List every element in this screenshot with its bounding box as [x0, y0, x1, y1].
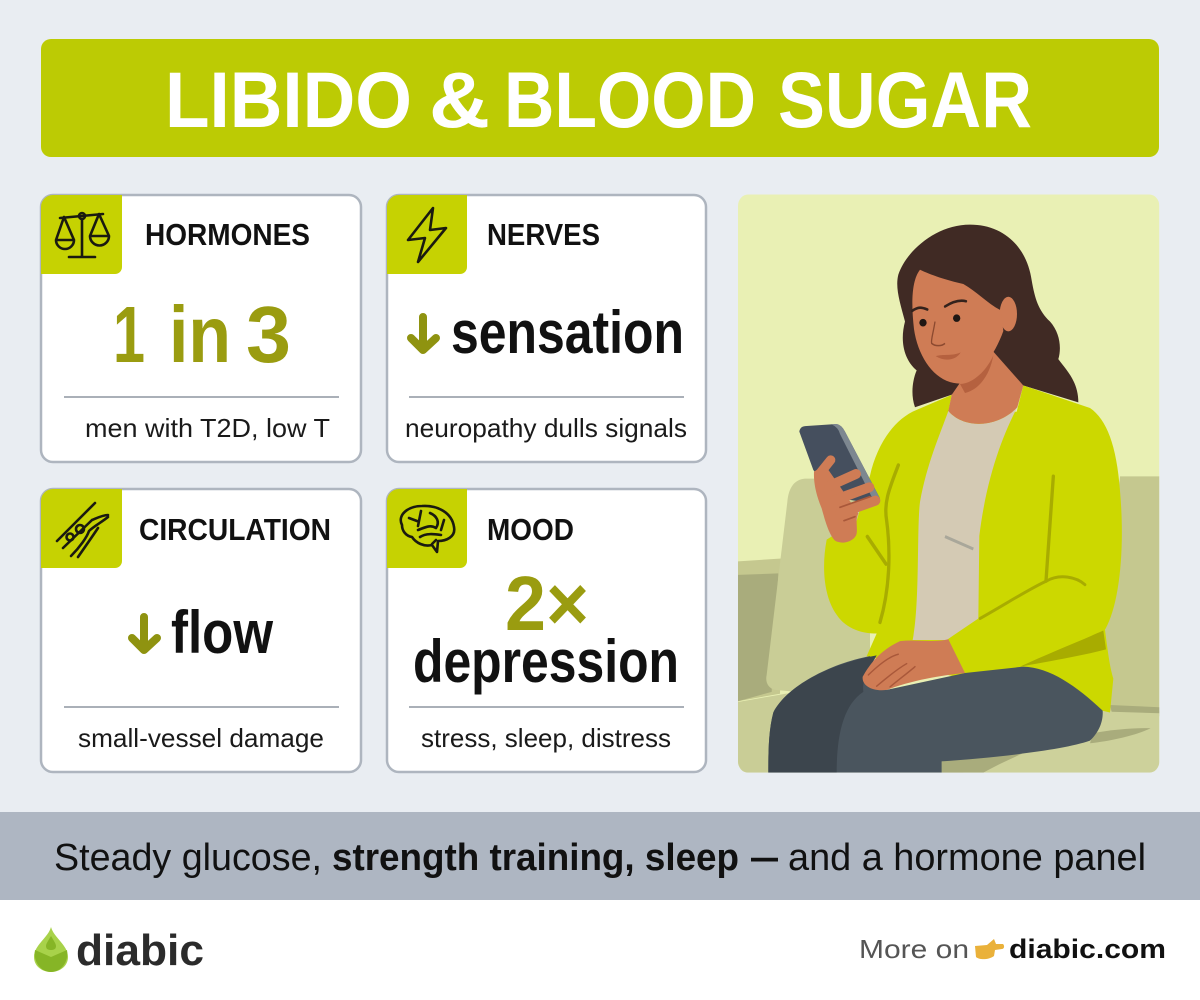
heading: circulation: CIRCULATION — [139, 512, 331, 547]
panel: circulation — [41, 489, 361, 772]
cardigan — [824, 385, 1122, 712]
panel: hormones — [41, 195, 361, 462]
illustration: woman on sofa with phone — [738, 195, 1159, 773]
takeaway band: and a hormone panel — [788, 837, 1146, 879]
stat: flow: flow — [171, 599, 273, 666]
panel: mood — [387, 489, 706, 772]
takeaway band: Steady glucose, — [54, 837, 322, 879]
icon: down arrow — [411, 317, 436, 350]
icon: down arrow — [132, 617, 157, 650]
shirt — [913, 407, 1017, 640]
title banner: LIBIDO — [165, 55, 412, 144]
hair — [897, 225, 1078, 407]
stat: 2x: 2× — [505, 561, 589, 647]
icon: balance scale — [56, 213, 109, 257]
logo: diabic: diabic — [76, 926, 204, 975]
link: more on diabic.com: More on — [859, 934, 969, 964]
icon: lightning bolt — [408, 208, 446, 262]
icon: brain — [401, 506, 454, 552]
stat: sensation: sensation — [451, 299, 684, 366]
link: more on diabic.com: diabic.com — [1009, 934, 1166, 964]
takeaway band: strength training, sleep — [332, 837, 739, 879]
caption: circulation: small-vessel damage — [78, 723, 324, 753]
panel: nerves — [387, 195, 706, 462]
holding hand — [814, 460, 875, 543]
caption: hormones: men with T2D, low T — [85, 413, 330, 443]
takeaway band: — — [751, 837, 778, 879]
caption: nerves: neuropathy dulls signals — [405, 413, 687, 443]
stat: 1 in 3: 1 — [113, 290, 145, 379]
caption: mood: stress, sleep, distress — [421, 723, 671, 753]
neck — [948, 352, 1023, 424]
stat: depression: depression — [413, 628, 679, 695]
heading: mood: MOOD — [487, 512, 574, 547]
cardigan folds — [867, 465, 1106, 667]
icon: blood vessel — [57, 503, 108, 557]
heading: nerves: NERVES — [487, 217, 600, 252]
phone and holding hand — [799, 424, 880, 543]
stat: 1 in 3: in — [169, 290, 231, 379]
icon: pointing hand — [975, 939, 1004, 959]
title banner: BLOOD — [504, 55, 756, 144]
title banner — [41, 39, 1159, 157]
title banner: SUGAR — [778, 55, 1032, 144]
sofa — [738, 476, 1159, 773]
link: more on diabic.com — [859, 934, 1166, 964]
title banner: & — [429, 55, 490, 144]
takeaway band — [0, 812, 1200, 900]
face — [912, 270, 1017, 393]
stat: 1 in 3 — [113, 290, 291, 379]
trousers — [768, 655, 1103, 773]
heading: hormones: HORMONES — [145, 217, 310, 252]
stat: 1 in 3: 3 — [246, 290, 291, 379]
footer — [0, 900, 1200, 1000]
phone — [799, 424, 880, 504]
lower hand — [863, 639, 965, 690]
